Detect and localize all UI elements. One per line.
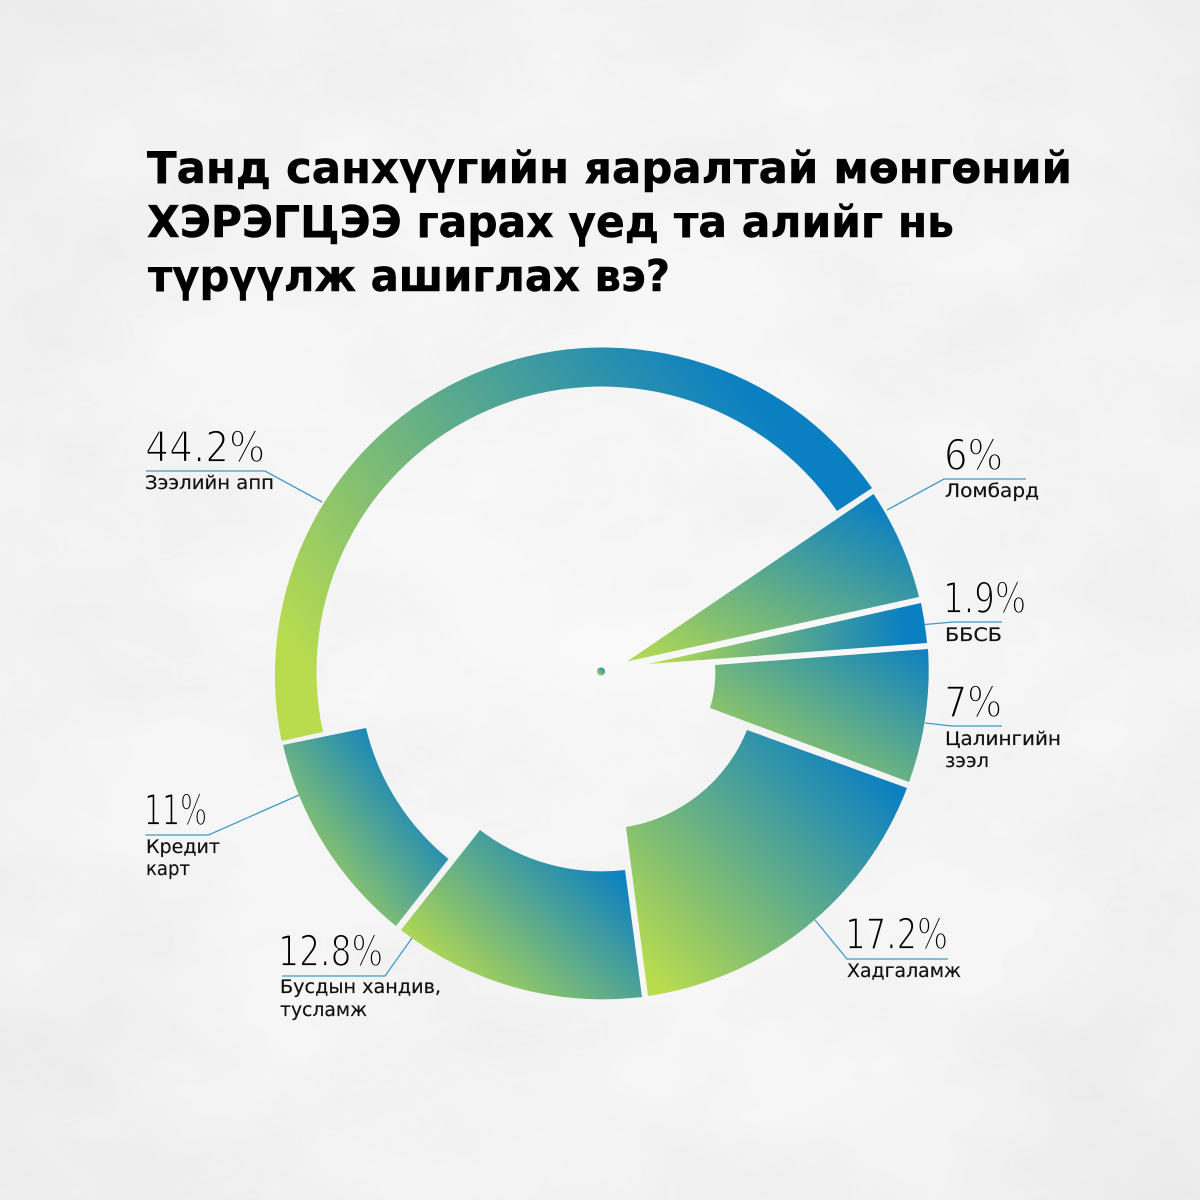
segment: Цалингийн зээл 7%	[710, 649, 929, 782]
label: Хадгаламж 17.2%: Хадгаламж	[847, 960, 961, 982]
label: ББСБ 1.9%: ББСБ	[945, 624, 1002, 646]
center dot	[597, 668, 605, 676]
label: Цалингийн зээл 7%: зээл	[945, 750, 989, 772]
segment: Хадгаламж 17.2%	[626, 730, 907, 996]
label: Зээлийн апп 44.2%	[145, 423, 322, 502]
label: Хадгаламж 17.2%: 17.2%	[845, 910, 948, 960]
label: Ломбард 6%: 6%	[944, 431, 1003, 481]
segment: Кредит карт 11%	[283, 728, 448, 926]
label: Бусдын хандив, тусламж 12.8%: Бусдын хандив,	[280, 976, 441, 998]
segment: Ломбард 6%	[627, 494, 919, 662]
segment: ББСБ 1.9%	[648, 603, 927, 664]
label: Цалингийн зээл 7%: Цалингийн	[945, 728, 1061, 750]
title: түрүүлж ашиглах вэ?	[148, 251, 670, 302]
label: Кредит карт 11%: Кредит	[146, 836, 220, 858]
label: Цалингийн зээл 7%	[925, 678, 1061, 772]
title	[147, 143, 1072, 302]
title: Танд санхүүгийн яаралтай мөнгөний	[147, 143, 1072, 194]
label: Бусдын хандив, тусламж 12.8%	[278, 927, 441, 1021]
label: Ломбард 6%	[887, 431, 1039, 510]
label: Бусдын хандив, тусламж 12.8%: 12.8%	[278, 927, 383, 977]
label: Кредит карт 11%: 11%	[144, 786, 207, 836]
label: ББСБ 1.9%	[925, 574, 1026, 646]
label: Цалингийн зээл 7%: 7%	[944, 678, 1002, 728]
label: ББСБ 1.9%: 1.9%	[943, 574, 1026, 624]
segment: Зээлийн апп 44.2%	[275, 348, 872, 741]
label: Зээлийн апп 44.2%: Зээлийн апп	[145, 472, 274, 494]
donut chart	[275, 348, 929, 999]
label: Кредит карт 11%	[144, 786, 299, 880]
label: Ломбард 6%: Ломбард	[945, 480, 1039, 502]
segment: Бусдын хандив, тусламж 12.8%	[401, 830, 642, 999]
label: Бусдын хандив, тусламж 12.8%: тусламж	[280, 999, 367, 1021]
label: Зээлийн апп 44.2%: 44.2%	[145, 423, 265, 473]
label: Хадгаламж 17.2%	[815, 910, 961, 982]
label: Кредит карт 11%: карт	[146, 858, 190, 880]
title: ХЭРЭГЦЭЭ гарах үед та алийг нь	[147, 197, 954, 248]
